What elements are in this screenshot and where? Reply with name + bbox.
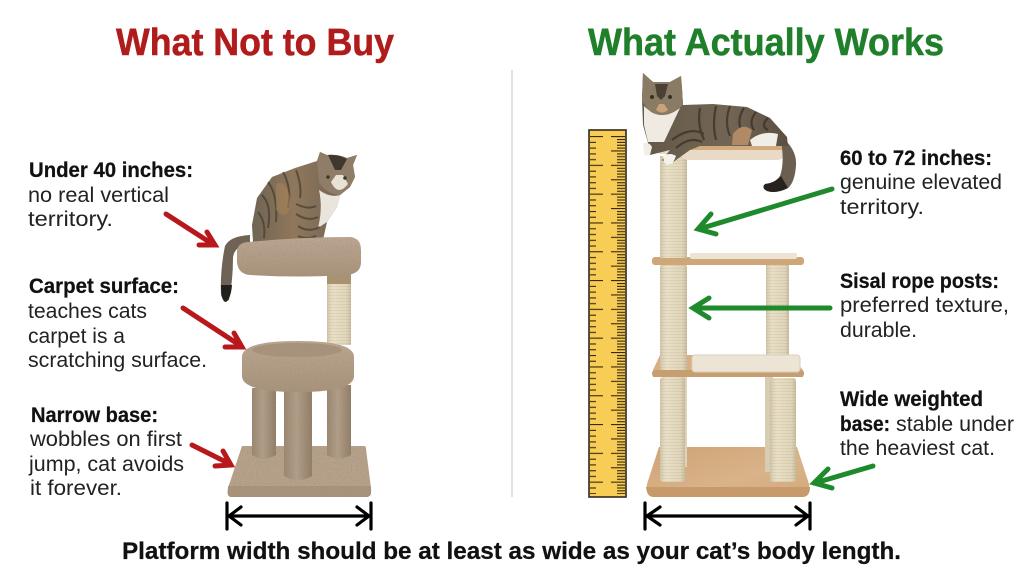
middle shelf <box>652 355 804 377</box>
callout: 60 to 72 inches <box>840 147 1002 219</box>
callout: 60 to 72 inches: genuine elevated <box>840 171 1002 194</box>
top platform <box>654 144 788 160</box>
right panel: sisal and wood cat tree with cat <box>642 73 810 497</box>
upper shelf <box>652 253 804 265</box>
wooden base <box>646 447 810 497</box>
callout: sisal rope posts <box>840 270 1009 342</box>
sitting tabby cat <box>252 152 357 242</box>
top sisal post <box>660 156 687 258</box>
callout: carpet surface: carpet is a <box>28 325 125 348</box>
callout: narrow base: Narrow base: <box>31 404 158 427</box>
carpeted legs <box>252 385 351 480</box>
green arrow: sisal rope posts <box>693 298 830 318</box>
callout: under 40 inches <box>28 159 193 231</box>
carpeted base <box>228 446 371 497</box>
green arrow: wide weighted base <box>814 466 873 488</box>
callout: narrow base: it forever. <box>30 477 122 500</box>
lying tabby cat <box>642 73 788 165</box>
green arrow: 60 to 72 inches <box>698 189 832 234</box>
rear posts <box>681 265 789 472</box>
left width arrow <box>227 503 371 529</box>
callout: wide weighted base: base: <box>840 413 890 436</box>
callout: narrow base: wobbles on first <box>29 428 182 451</box>
callout: carpet surface <box>28 275 207 372</box>
cat tail, right tree <box>763 137 796 192</box>
callout: under 40 inches: no real vertical <box>28 184 169 207</box>
red arrow: carpet surface <box>183 308 242 347</box>
callout: narrow base: jump, cat avoids <box>28 453 184 476</box>
red arrow: under 40 inches <box>166 214 215 245</box>
right width arrow <box>645 503 810 529</box>
callout: wide weighted base <box>840 388 1014 460</box>
cat tail, left tree <box>221 235 250 301</box>
ruler <box>589 130 626 497</box>
callout: wide weighted base: stable under <box>896 413 1014 436</box>
title: What Actually Works: What Actually Works <box>588 22 944 64</box>
callout: 60 to 72 inches: 60 to 72 inches: <box>840 147 992 170</box>
callout: under 40 inches: territory. <box>28 208 113 231</box>
red arrow: narrow base <box>192 445 231 466</box>
sisal post of carpeted tree <box>327 273 351 345</box>
callout: carpet surface: scratching surface. <box>28 349 207 372</box>
upper carpeted ring platform <box>237 237 361 276</box>
footer note: Platform width should be at least as wide as your cat’s body length. <box>122 538 901 565</box>
callout: carpet surface: teaches cats <box>28 300 147 323</box>
title: What Not to Buy: What Not to Buy <box>116 22 394 64</box>
left panel: carpeted cat tree with cat <box>221 152 371 497</box>
callout: carpet surface: Carpet surface: <box>29 275 179 298</box>
callout: under 40 inches: Under 40 inches: <box>29 159 193 182</box>
callout: sisal rope posts: Sisal rope posts: <box>840 270 999 293</box>
callout: sisal rope posts: preferred texture, <box>840 294 1009 317</box>
lower carpeted ring platform <box>242 341 354 392</box>
callout: wide weighted base: Wide weighted <box>840 388 983 411</box>
middle sisal post <box>660 265 687 370</box>
callout: wide weighted base: the heaviest cat. <box>840 437 995 460</box>
callout: 60 to 72 inches: territory. <box>840 196 924 219</box>
callout: narrow base <box>28 404 184 500</box>
callout: sisal rope posts: durable. <box>840 319 917 342</box>
sisal posts <box>660 377 796 482</box>
